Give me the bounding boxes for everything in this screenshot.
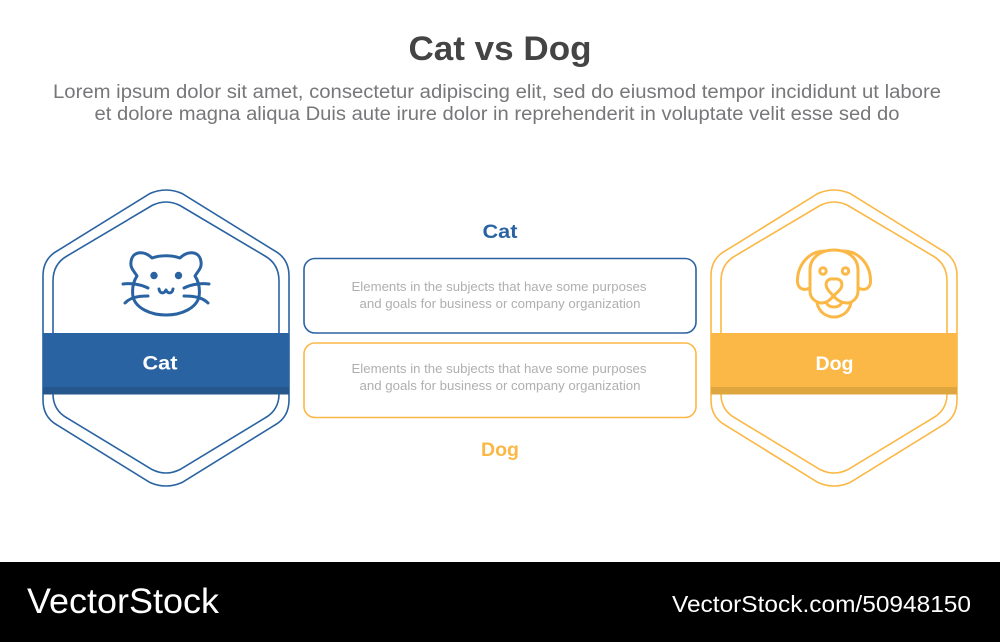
panel: cat description: and goals for business or company organization xyxy=(360,297,641,311)
panel: dog description: Elements in the subjects that have some purposes xyxy=(352,362,646,376)
title: Cat vs Dog xyxy=(408,30,592,68)
panel: cat description: Elements in the subjects that have some purposes xyxy=(352,280,646,294)
panel: dog description: and goals for business or company organization xyxy=(360,379,641,393)
heading: cat: Cat xyxy=(482,222,518,243)
cat label band xyxy=(43,333,289,394)
footer logo text: VectorStock xyxy=(27,582,220,621)
subtitle text: et dolore magna aliqua Duis aute irure dolor in reprehenderit in voluptate velit esse sed do xyxy=(94,104,899,125)
cat band label: Cat xyxy=(142,352,178,374)
panel: dog description xyxy=(304,343,696,418)
dog label band xyxy=(711,333,957,394)
panel: dog hexagon xyxy=(711,190,957,486)
outer hexagon outline xyxy=(43,190,289,486)
outer hexagon outline xyxy=(711,190,957,486)
icon: cat face xyxy=(123,253,209,315)
subtitle text: Lorem ipsum dolor sit amet, consectetur adipiscing elit, sed do eiusmod tempor incididunt ut labore xyxy=(53,82,941,103)
panel: cat hexagon xyxy=(43,190,289,486)
heading: dog: Dog xyxy=(481,440,519,461)
inner hexagon outline xyxy=(721,202,947,473)
subtitle text xyxy=(53,82,941,125)
footer url text: VectorStock.com/50948150 xyxy=(672,591,971,617)
dog band label: Dog xyxy=(816,353,854,375)
footer bar xyxy=(0,562,1000,642)
panel: cat description xyxy=(304,258,696,333)
inner hexagon outline xyxy=(53,202,279,473)
icon: dog face xyxy=(797,250,871,317)
